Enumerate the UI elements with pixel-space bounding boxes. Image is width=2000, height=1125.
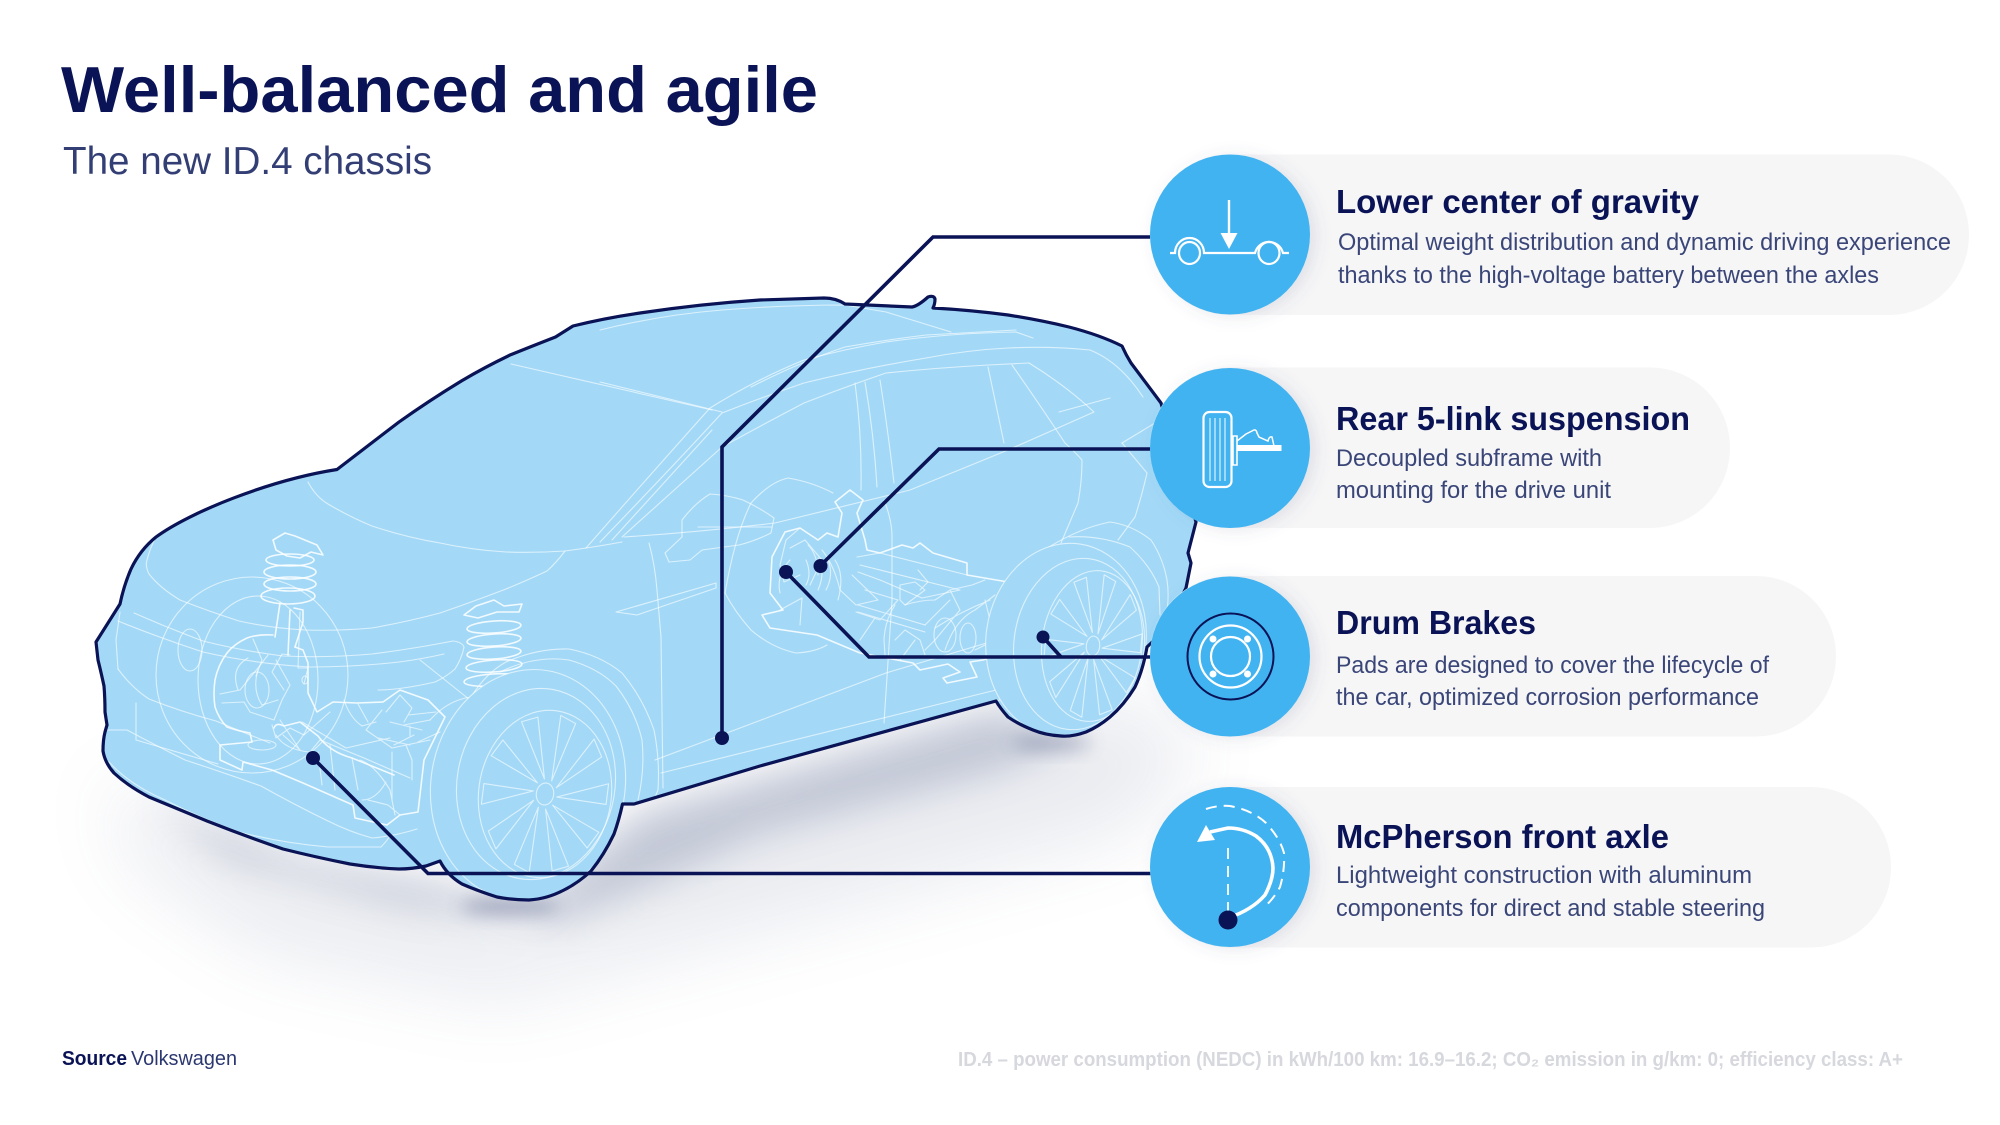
leader line: drum brakes <box>779 565 1170 657</box>
heading: McPherson front axle <box>1336 818 1669 855</box>
icon: brake drum <box>1150 576 1310 736</box>
title: Well-balanced and agile <box>61 53 818 126</box>
roof and windows <box>600 305 951 332</box>
body text: Pads are designed to cover the lifecycle of <box>1336 652 1769 679</box>
panel: McPherson front axle <box>1150 787 1891 948</box>
body text: the car, optimized corrosion performance <box>1336 684 1759 711</box>
front wheel spokes <box>478 710 612 878</box>
icon: wheel with suspension <box>1150 368 1310 528</box>
front wheel arch <box>430 649 658 810</box>
body text <box>1336 652 1769 711</box>
icon: steering arc <box>1150 787 1310 947</box>
leader line: McPherson front axle <box>306 751 1170 874</box>
heading: Rear 5-link suspension <box>1336 400 1690 437</box>
panel background <box>1150 787 1891 948</box>
door seams <box>649 543 663 788</box>
car outline <box>96 296 1196 900</box>
body text: Optimal weight distribution and dynamic driving experience <box>1338 229 1951 256</box>
source note: Source <box>62 1048 127 1070</box>
rear front-axle spring <box>464 600 522 618</box>
headlight ellipse <box>178 629 202 671</box>
icon: chassis with downward arrow <box>1150 154 1310 314</box>
panel: lower center of gravity <box>1150 154 1969 315</box>
body text <box>1336 862 1765 922</box>
far rear wheel ghost <box>725 593 827 653</box>
panel background <box>1150 576 1836 736</box>
body text <box>1338 229 1951 289</box>
far front wheel ghost <box>156 577 348 773</box>
heading: Lower center of gravity <box>1336 183 1700 220</box>
door handle <box>616 583 716 615</box>
panel: rear 5-link suspension <box>1150 368 1730 528</box>
rear wheel arch <box>1048 522 1169 607</box>
leader line: lower center of gravity <box>715 237 1170 745</box>
car body fill <box>96 296 1196 900</box>
source note: Volkswagen <box>131 1048 237 1070</box>
front suspension <box>273 533 323 558</box>
body text: mounting for the drive unit <box>1336 477 1611 504</box>
rear tyre and rim <box>986 546 1052 690</box>
car illustration <box>96 296 1196 916</box>
car ground shadow <box>110 700 1200 1000</box>
panel: drum brakes <box>1150 576 1836 736</box>
consumption disclaimer: ID.4 – power consumption (NEDC) in kWh/100 km: 16.9–16.2; CO₂ emission in g/km: 0; efficiency class: A+ <box>958 1049 1903 1071</box>
front tyre and rim <box>468 674 521 700</box>
rear wheel spokes <box>1040 570 1146 722</box>
leader line: rear 5-link suspension <box>814 449 1170 573</box>
side mirror <box>665 494 774 562</box>
body text: Lightweight construction with aluminum <box>1336 862 1752 889</box>
heading: Drum Brakes <box>1336 604 1536 641</box>
body text: Decoupled subframe with <box>1336 445 1602 472</box>
panel background <box>1150 368 1730 528</box>
car body line work <box>107 305 1168 916</box>
subtitle: The new ID.4 chassis <box>63 140 432 183</box>
panel background <box>1150 154 1969 315</box>
body text: thanks to the high-voltage battery between the axles <box>1338 262 1879 289</box>
source note <box>62 1048 237 1070</box>
rear axle and drive unit <box>762 490 1008 683</box>
body text <box>1336 445 1611 504</box>
body text: components for direct and stable steering <box>1336 895 1765 922</box>
